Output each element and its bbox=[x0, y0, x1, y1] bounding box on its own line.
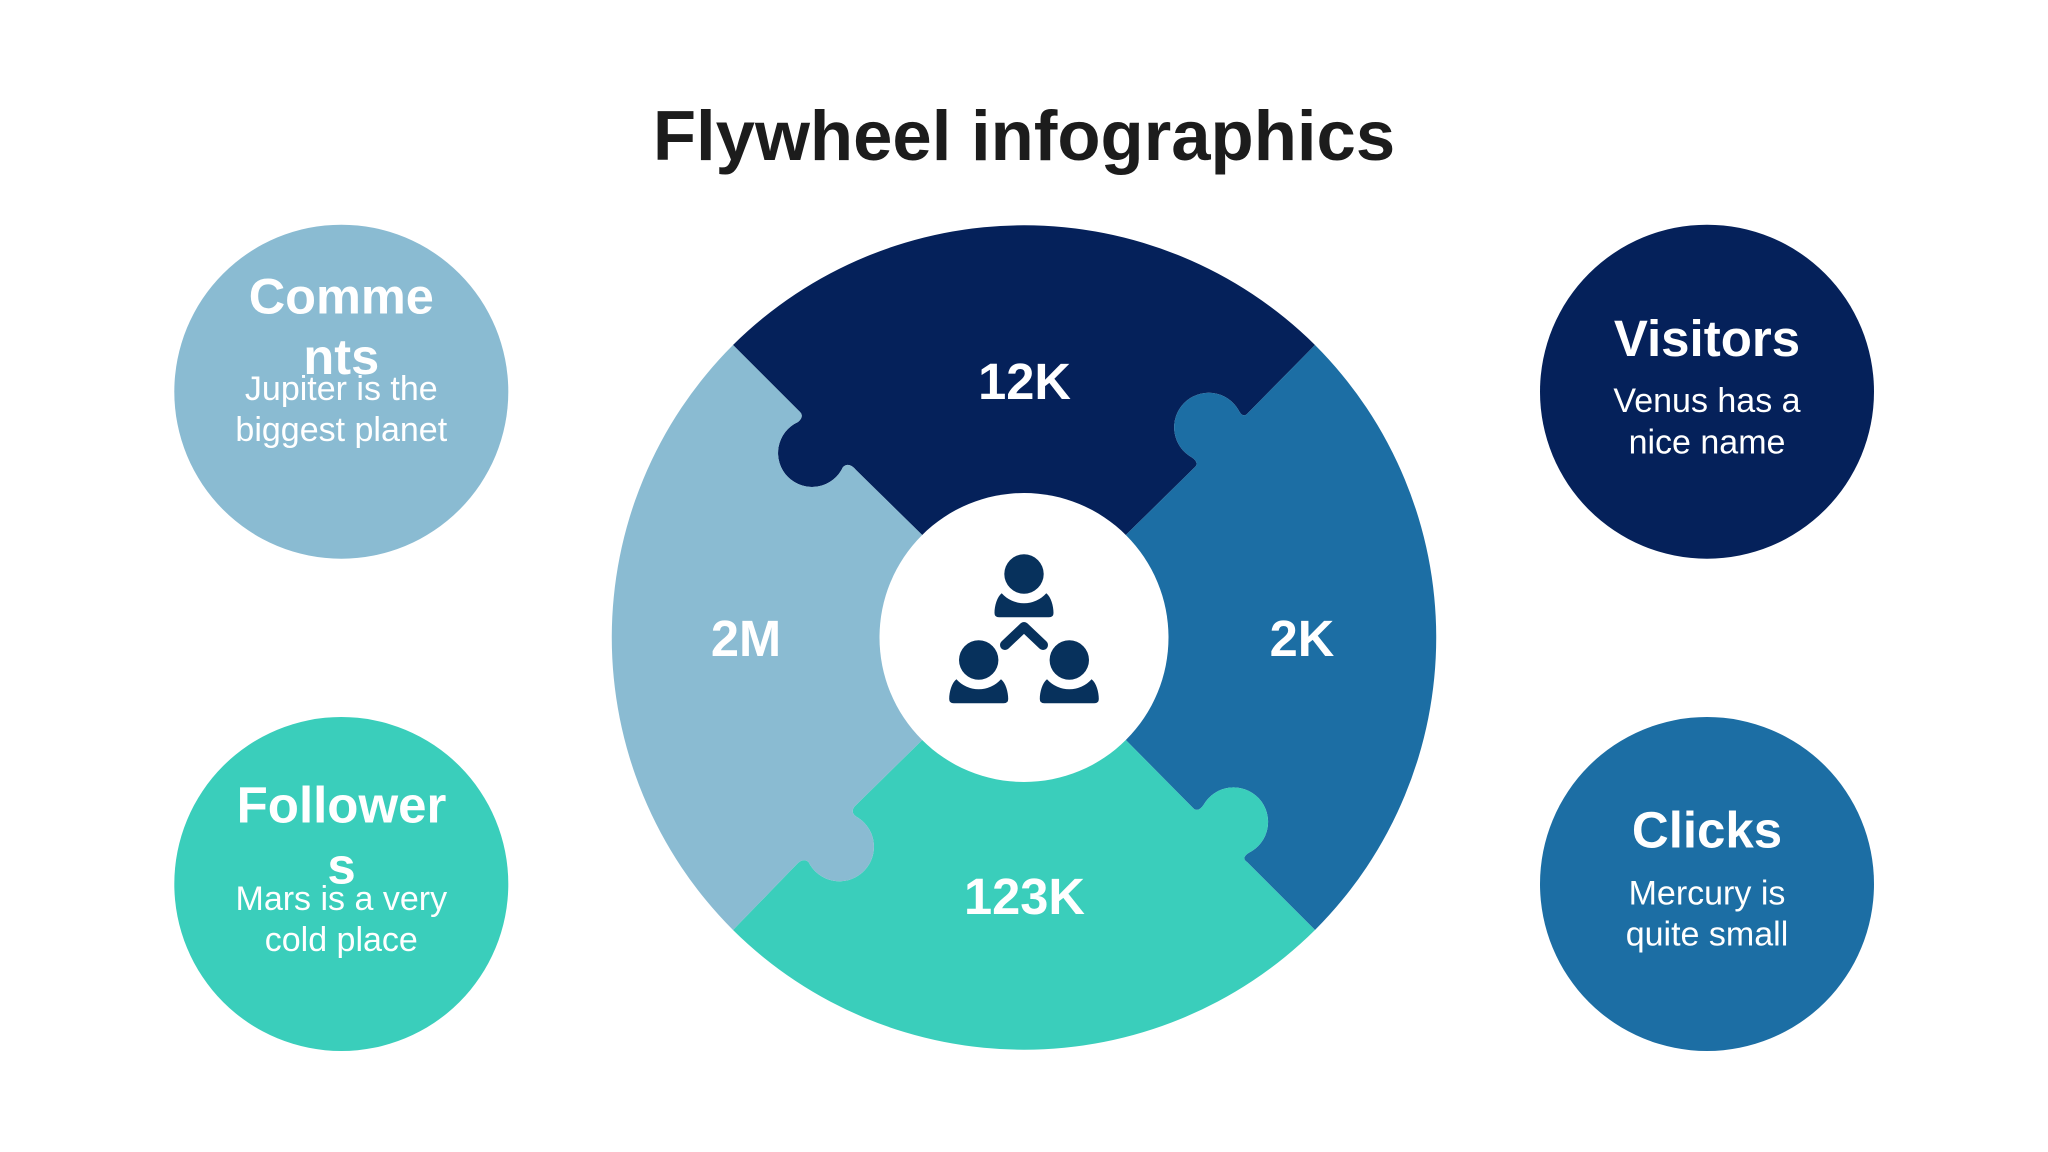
heading: comments: nts bbox=[303, 328, 379, 385]
icon: network of people bbox=[949, 554, 1099, 703]
panel: clicks bbox=[1540, 717, 1874, 1051]
text block: followers description: Mars is a very bbox=[236, 880, 447, 918]
icon: chevron connector bbox=[1005, 627, 1043, 645]
text block: comments description: biggest planet bbox=[235, 411, 448, 449]
panel: visitors bbox=[1540, 225, 1874, 559]
text block: clicks description: quite small bbox=[1626, 915, 1788, 953]
heading: visitors: Visitors bbox=[1614, 310, 1800, 367]
heading: comments: Comme bbox=[249, 268, 434, 324]
text block: followers description: cold place bbox=[265, 921, 418, 959]
panel: comments bbox=[174, 225, 508, 559]
text block: visitors description: nice name bbox=[1629, 423, 1785, 461]
segment: 2M comments bbox=[612, 345, 923, 930]
value: 12K: 12K bbox=[978, 353, 1071, 410]
value: 2K: 2K bbox=[1270, 610, 1335, 667]
icon: top person bbox=[994, 554, 1054, 617]
segment: 2K clicks bbox=[1125, 345, 1436, 930]
chart: flywheel puzzle wheel bbox=[612, 225, 1436, 1050]
segment: 123K followers bbox=[733, 740, 1315, 1050]
heading: followers: Follower bbox=[237, 776, 446, 834]
hub circle bbox=[880, 493, 1168, 782]
text block: clicks description: Mercury is bbox=[1629, 874, 1785, 912]
title: Flywheel infographics bbox=[653, 96, 1395, 175]
icon: right person bbox=[1040, 640, 1099, 703]
heading: followers: s bbox=[327, 838, 356, 894]
icon: left person bbox=[949, 640, 1008, 703]
heading: clicks: Clicks bbox=[1632, 802, 1782, 858]
value: 2M: 2M bbox=[711, 610, 781, 667]
panel: followers bbox=[174, 717, 508, 1051]
segment: 12K visitors bbox=[733, 225, 1315, 536]
text block: comments description: Jupiter is the bbox=[245, 370, 438, 408]
text block: visitors description: Venus has a bbox=[1613, 382, 1801, 420]
value: 123K: 123K bbox=[964, 868, 1085, 925]
